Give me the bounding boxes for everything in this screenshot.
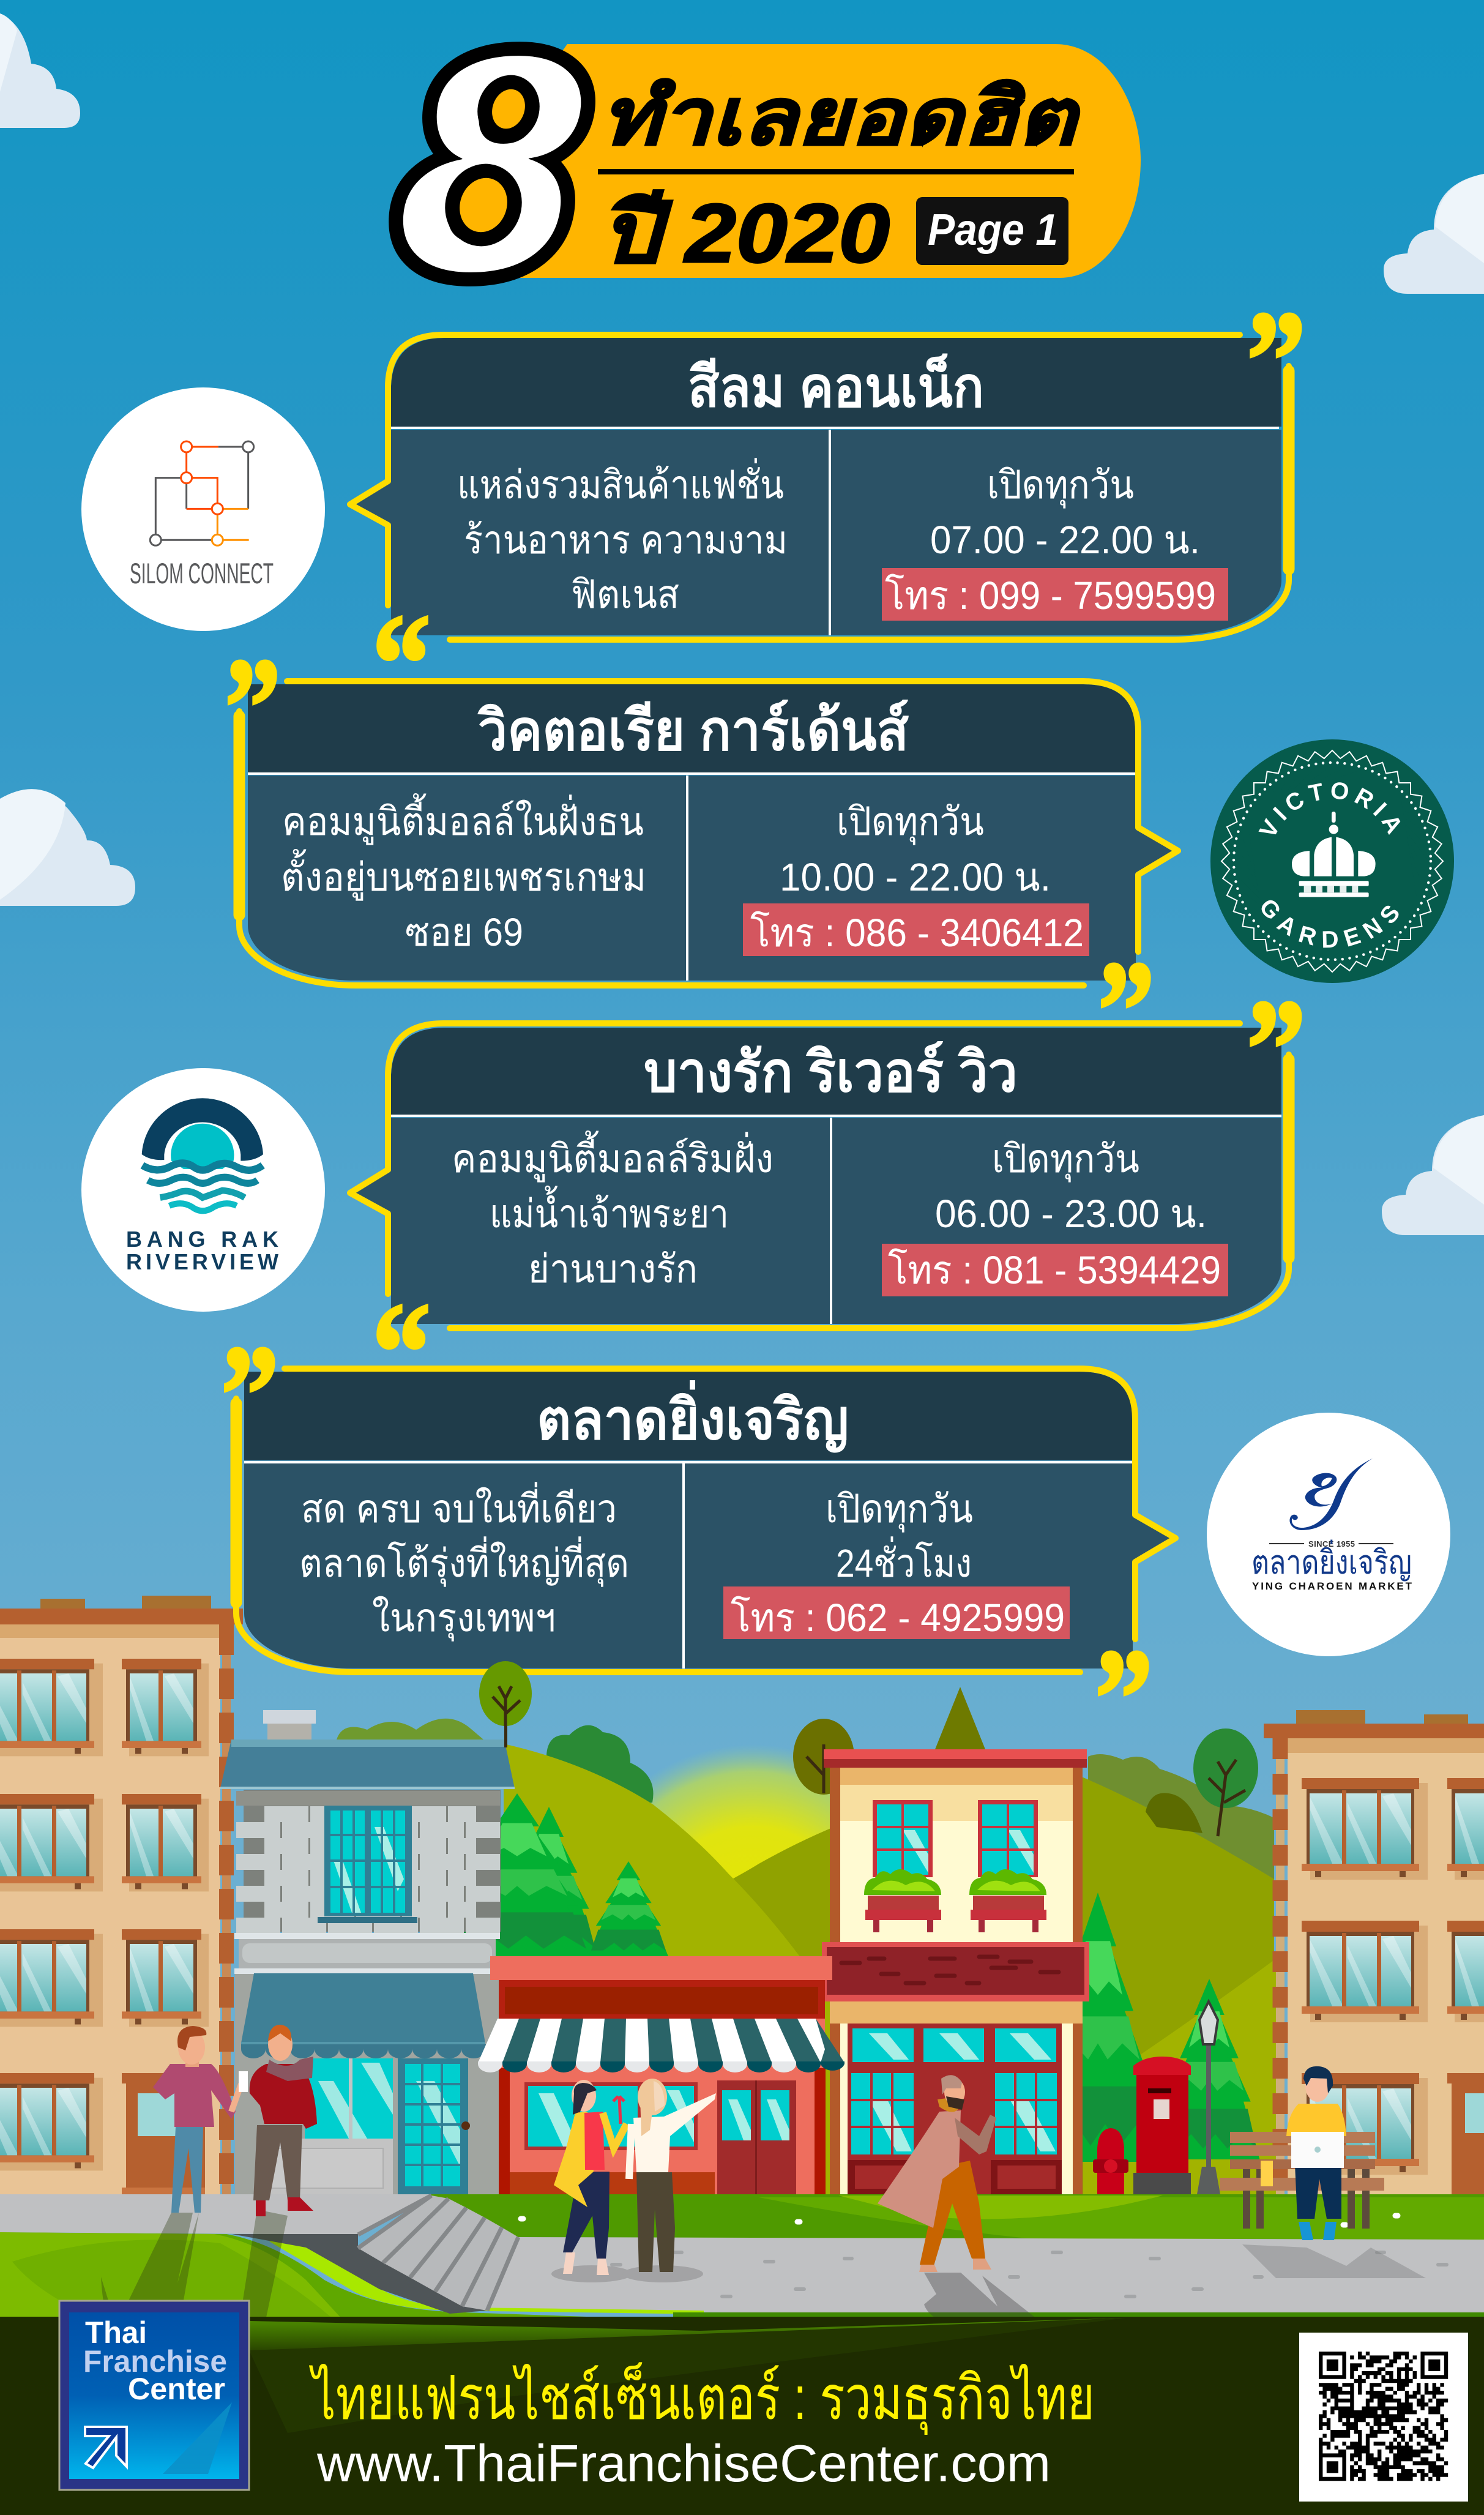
yellow outline (350, 335, 1289, 640)
upper windows with planters (864, 1800, 1046, 1932)
Thai Franchise Center logo (59, 2301, 249, 2490)
grass reflection (249, 2318, 1126, 2350)
description: แหล่งรวมสินค้าแฟชั่น (457, 458, 784, 507)
sign band (234, 1933, 500, 1974)
description: คอมมูนิตี้มอลล์ริมฝั่ง (452, 1130, 774, 1183)
shop window (524, 2082, 698, 2150)
opening hours: 07.00 - 22.00 น. (930, 518, 1200, 562)
person: bearded man walking (878, 2075, 996, 2272)
crown icon (1292, 812, 1376, 897)
opening hours (930, 463, 1200, 562)
title (391, 0, 1141, 335)
website url: www.ThaiFranchiseCenter.com (316, 2435, 1051, 2493)
shop front (848, 2024, 1062, 2194)
upper window (318, 1806, 417, 1923)
logo: Silom Connect: SILOM CONNECT (130, 557, 274, 589)
stone upper wall (236, 1790, 501, 1932)
blue awning (241, 1973, 486, 2058)
person: woman in yellow coat (554, 2080, 627, 2275)
panel: Bang Rak Riverview card (350, 971, 1306, 1430)
opening hours: เปิดทุกวัน (992, 1137, 1139, 1183)
headline line one: ทำเลยอดฮิต (601, 73, 1081, 161)
description: สด ครบ จบในที่เดียว (301, 1482, 617, 1531)
roof (824, 1749, 1087, 1768)
main path (487, 2237, 1484, 2314)
phone: โทร : 099 - 7599599 (885, 574, 1216, 618)
divider lines (391, 428, 1279, 635)
panel: Victoria Gardens card (225, 629, 1178, 1088)
description: คอมมูนิตี้มอลล์ในฝั่งธน (282, 793, 644, 845)
round tree right (1146, 1728, 1258, 1836)
left grass (0, 2232, 1484, 2320)
description: ย่านบางรัก (528, 1247, 698, 1291)
logo wordmark (83, 2315, 227, 2406)
lawn (428, 2194, 1484, 2241)
bench (1220, 2132, 1384, 2229)
red post box (1133, 2057, 1191, 2194)
wavy seal ring (1221, 750, 1444, 973)
arrow icon (85, 2427, 127, 2468)
page badge (916, 197, 1068, 265)
person: man on bench with laptop (1286, 2066, 1346, 2240)
background hills and trees (337, 1687, 1276, 2197)
street furniture (1093, 2001, 1384, 2229)
card title: สีลม คอนเน็ก (688, 353, 984, 419)
yellow corner building (822, 1749, 1089, 2194)
closing quote mark: ” (1247, 971, 1306, 1127)
footer slogan: ไทยแฟรนไชส์เซ็นเตอร์ : รวมธุรกิจไทย (309, 2361, 1095, 2435)
headline line two: ปี 2020 (601, 187, 890, 280)
Thai market name: ตลาดยิ่งเจริญ (1251, 1539, 1412, 1581)
QR code (1299, 2333, 1468, 2502)
chimney (263, 1710, 316, 1741)
grey stone shop (220, 1710, 515, 2195)
phone: โทร : 086 - 3406412 (750, 911, 1084, 955)
logo: Victoria Gardens (1210, 739, 1454, 983)
maroon band (822, 1942, 1089, 2001)
right apartment building (1264, 1710, 1484, 2200)
red brick shop (478, 1956, 845, 2194)
street lamp (1197, 2001, 1220, 2194)
logo: Bang Rak Riverview: BANG RAK (126, 1227, 278, 1252)
opening hours: 10.00 - 22.00 น. (780, 855, 1051, 899)
opening hours: เปิดทุกวัน (837, 799, 984, 845)
logo wordmark: Thai (85, 2315, 147, 2350)
logo: Bang Rak Riverview: RIVERVIEW (126, 1249, 278, 1274)
opening hours (780, 799, 1051, 899)
card header (391, 338, 1281, 427)
sun glow (569, 1744, 936, 2112)
logo: Ying Charoen Market (1207, 1413, 1450, 1656)
description: ร้านอาหาร ความงาม (464, 518, 788, 562)
closing quote mark bottom: ” (1098, 932, 1155, 1088)
description (457, 458, 788, 616)
description: ตลาดโต้รุ่งที่ใหญ่ที่สุด (299, 1536, 629, 1587)
building triangle (163, 2402, 232, 2474)
cloud top right (1384, 174, 1484, 294)
card body (248, 775, 1177, 981)
person: man with cup (153, 2026, 248, 2213)
divider lines (244, 1462, 1133, 1669)
white flowers (521, 2216, 1398, 2225)
description: ในกรุงเทพฯ (372, 1596, 556, 1642)
opening hours (826, 1487, 973, 1585)
left sidewalk (0, 2194, 431, 2235)
opening hours: เปิดทุกวัน (987, 463, 1134, 509)
lower right hill (1083, 1959, 1276, 2197)
description: ฟิตเนส (571, 572, 679, 616)
card header (248, 684, 1136, 772)
card header (391, 1028, 1281, 1115)
divider lines (248, 774, 1136, 981)
title divider (598, 169, 1074, 174)
description (299, 1482, 629, 1642)
description: ซอย 69 (405, 910, 523, 954)
card header (244, 1372, 1133, 1460)
person: woman in cream top (629, 2079, 716, 2272)
card title: วิคตอเรีย การ์เด้นส์ (477, 699, 909, 762)
card body (244, 1463, 1174, 1669)
cloud middle right (1382, 1115, 1484, 1235)
round tree over card edge (479, 1661, 532, 1747)
ground floor (235, 1974, 502, 2195)
phone: โทร : 081 - 5394429 (888, 1248, 1221, 1292)
card body (350, 1118, 1281, 1324)
striped awning (478, 2019, 845, 2072)
red door (717, 2080, 796, 2194)
left apartment building (0, 1596, 243, 2200)
yellow outline (239, 681, 1178, 985)
seal wordmark: GARDENS (1262, 900, 1399, 947)
blue door (398, 2058, 470, 2194)
closing quote mark bottom: ” (1095, 1620, 1153, 1776)
ground: lawn, path and stairs (0, 2194, 1484, 2344)
since line: SINCE 1955 (1308, 1539, 1355, 1549)
person: man in red sweater (250, 2025, 317, 2216)
description: แม่น้ำเจ้าพระยา (490, 1186, 729, 1236)
opening hours (935, 1137, 1207, 1236)
roof (220, 1740, 515, 1789)
page badge: Page 1 (928, 206, 1058, 255)
title banner (471, 44, 1141, 278)
closing quote mark top: ” (221, 1317, 279, 1473)
closing quote mark top: ” (225, 629, 281, 785)
logo wordmark: Center (128, 2372, 225, 2406)
left hill (504, 1744, 857, 2197)
logo: Silom Connect (81, 387, 325, 631)
opening quote mark: “ (372, 585, 431, 741)
description (452, 1130, 774, 1291)
big number 8: 8 (391, 0, 591, 335)
phone: โทร : 062 - 4925999 (731, 1596, 1065, 1640)
path speckles (612, 2252, 1447, 2296)
cloud middle left (0, 789, 135, 906)
panel: Ying Charoen market card (221, 1317, 1176, 1776)
stairs (232, 2195, 518, 2314)
opening quote mark: “ (372, 1274, 431, 1430)
right hill (673, 1777, 1274, 2197)
card title: ตลาดยิ่งเจริญ (537, 1380, 849, 1453)
English market name: YING CHAROEN MARKET (1252, 1580, 1412, 1592)
description (281, 793, 646, 954)
divider lines (391, 1116, 1281, 1324)
pine trees (500, 1807, 598, 1957)
closing quote mark: ” (1247, 282, 1306, 438)
card body (350, 430, 1281, 635)
footer band (0, 2317, 1484, 2515)
script monogram (1289, 1459, 1373, 1530)
opening hours: เปิดทุกวัน (826, 1487, 973, 1533)
opening hours: 06.00 - 23.00 น. (935, 1192, 1207, 1236)
card title: บางรัก ริเวอร์ วิว (644, 1041, 1018, 1104)
description: ตั้งอยู่บนซอยเพชรเกษม (281, 849, 646, 901)
cloud top left (0, 13, 80, 128)
red hydrant (1093, 2128, 1128, 2194)
yellow outline (350, 1023, 1289, 1328)
yellow outline (236, 1369, 1176, 1672)
figure shadows (101, 2210, 1426, 2344)
opening hours: 24ชั่วโมง (836, 1536, 972, 1585)
seal wordmark: VICTORIA (1258, 782, 1400, 835)
brick base (510, 2172, 715, 2194)
panel: Silom Connect card (350, 282, 1306, 741)
logo wordmark: Franchise (83, 2344, 227, 2379)
seal wordmark (1258, 782, 1400, 947)
logo: Bang Rak Riverview (81, 1068, 325, 1312)
